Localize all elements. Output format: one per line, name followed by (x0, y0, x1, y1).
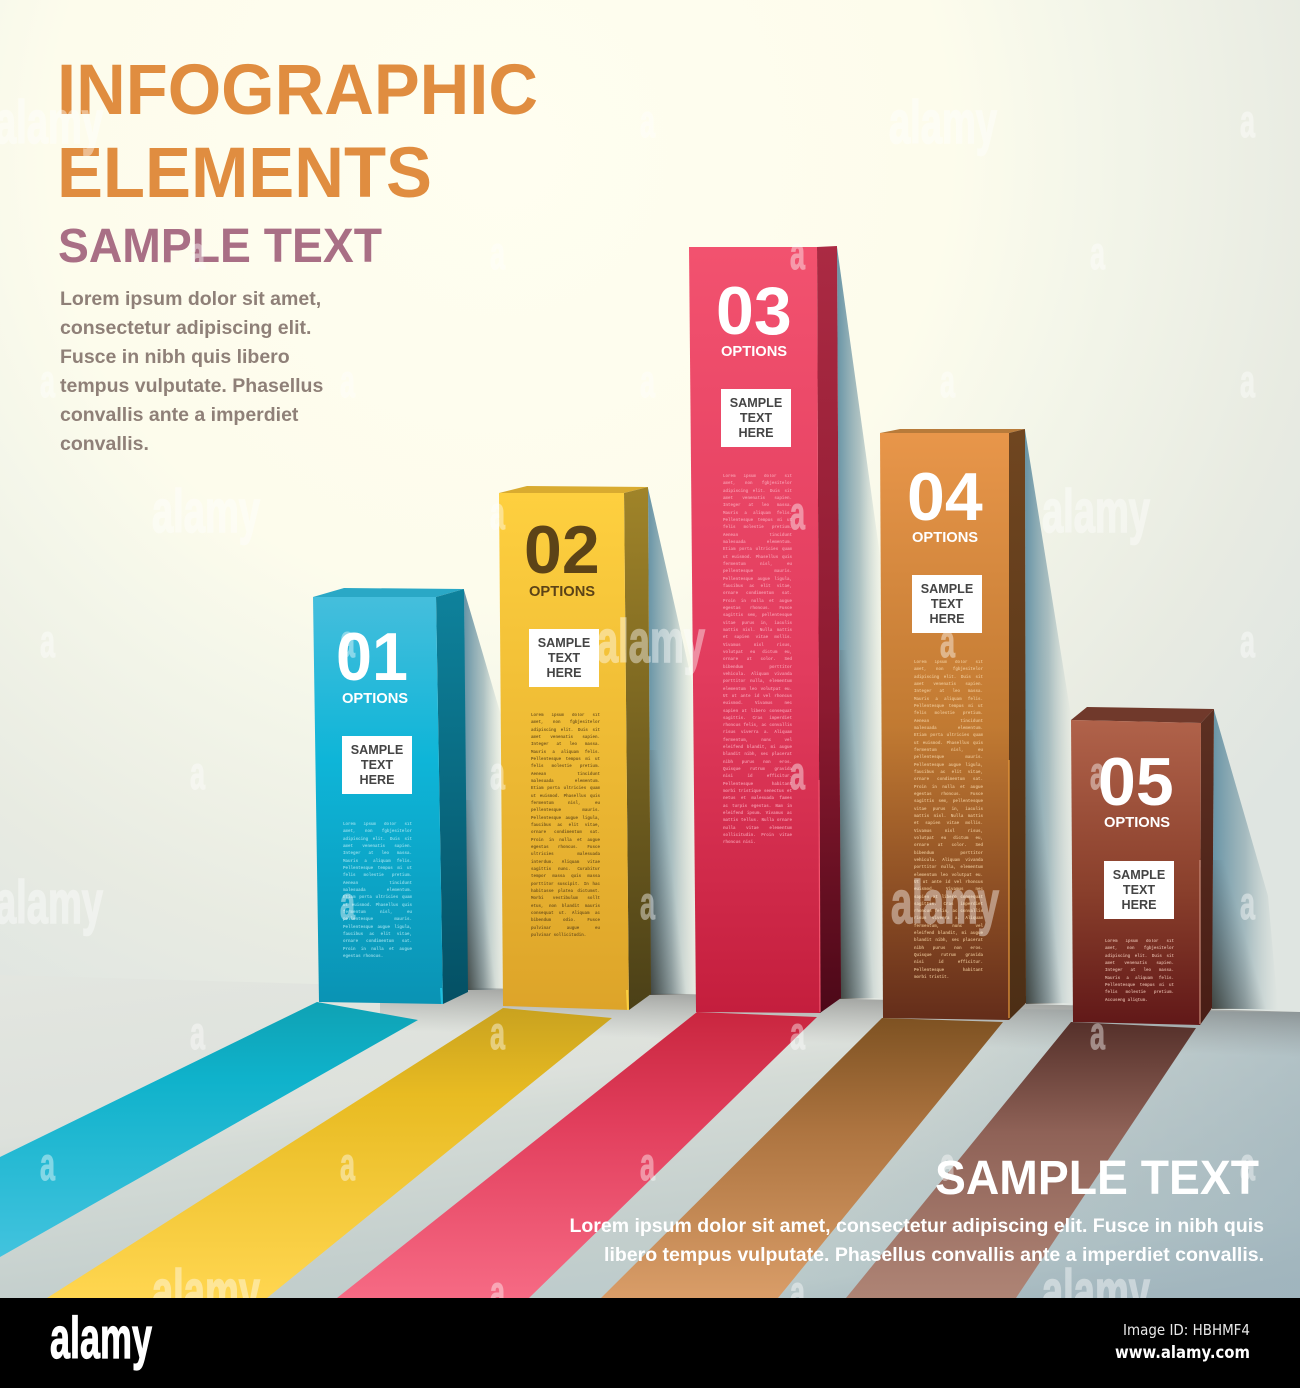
bar 05 white label: HERE (1122, 898, 1156, 912)
stock watermarks: alamy (152, 1258, 260, 1325)
bar 03 body text: Mauris a aliquam felis. (723, 512, 792, 516)
bar 03 body text: eleifend blandit, mi augue (723, 746, 792, 750)
bar 04 body text: Pellentesque augue ligula, (914, 764, 983, 768)
bar 04 body text: Ut ut ante id vel rhoncus (914, 881, 983, 885)
wall shadows cast by bars (464, 247, 1280, 1010)
bar 04 body text: felis molestie pretium. (914, 712, 983, 716)
bar 04 front face (880, 433, 1009, 1020)
stock watermarks: a (1090, 747, 1105, 799)
stock watermarks: a (190, 227, 205, 279)
bar 04 body text: Aenean tincidunt (914, 720, 983, 724)
footer image id: Image ID: HBHMF4 (1123, 1321, 1250, 1339)
bar 05 number: 05 (1098, 744, 1174, 820)
stock watermarks: a (1240, 877, 1255, 929)
bar 03 edge highlight (819, 780, 820, 1012)
bar 02 white label: SAMPLE (538, 636, 590, 650)
stock watermarks: a (1090, 227, 1105, 279)
panel: bar 03 (689, 246, 841, 1013)
bar 02 body text: ut euismod. Phasellus quis (531, 795, 600, 799)
bar 03 body text: rhoncus felis, ac convallis (723, 724, 792, 728)
stock watermarks: a (790, 747, 805, 799)
bar 02 body text: sagittis nunc. Curabitur (531, 868, 600, 872)
title (57, 51, 538, 213)
bar 01 bottom tab (440, 988, 443, 1004)
bar 03 body text: Etiam porta ultricies quam (723, 548, 792, 552)
bottom paragraph: libero tempus vulputate. Phasellus convallis ante a imperdiet convallis. (604, 1244, 1264, 1266)
bar 04 body text: fermentum nisl, eu (914, 749, 983, 753)
bar 02 body text: amet, non fgbjesitelor (531, 721, 600, 725)
bar 02 top face (499, 486, 648, 493)
bar 03 body text: egestas rhoncus. Fusce (723, 607, 792, 611)
bottom paragraph: Lorem ipsum dolor sit amet, consectetur adipiscing elit. Fusce in nibh quis (569, 1215, 1264, 1237)
bottom heading: SAMPLE TEXT (935, 1151, 1259, 1205)
bar 01 body text (343, 822, 412, 967)
bar 04 body text: vitae purus in, iaculis (914, 808, 983, 812)
panel: bar 01 (313, 588, 468, 1004)
bar 02 body text (531, 713, 600, 945)
stripe: yellow (47, 1008, 612, 1298)
bar 03 body text: sagittis sem, pellentesque (723, 614, 792, 618)
stock watermarks: a (490, 1007, 505, 1059)
wall background (0, 0, 1300, 1020)
bar 01 body text: Proin in nulla et augue (343, 948, 412, 952)
stripe: orange (601, 1018, 1003, 1298)
bar 05 front face (1071, 720, 1201, 1025)
bar 03 body text: ornare at color. Sed (723, 658, 792, 662)
bar 01 body text: adipiscing elit. Duis sit (343, 838, 412, 842)
stock watermarks: a (40, 355, 55, 407)
bar 02 body text: bibendum odio. Fusce (531, 919, 600, 923)
bar 03 white label: HERE (738, 426, 774, 440)
stock watermarks: alamy (152, 478, 260, 545)
bar 02 body text: pellentesque mauris. (531, 809, 600, 813)
bar 04 body text: Lorem ipsum dolor sit (914, 661, 983, 665)
subtitle: SAMPLE TEXT (58, 219, 382, 273)
bar 01 white label: HERE (360, 773, 394, 787)
bar 01 body text: Etiam porta ultricies quam (343, 896, 412, 900)
stock watermarks: alamy (597, 608, 705, 675)
stock watermarks: a (790, 1266, 805, 1318)
bar 05 body text: felis molestie pretium. (1105, 991, 1174, 995)
bar 03 body text (723, 474, 792, 854)
bar 05 options label: OPTIONS (1104, 815, 1170, 831)
stock watermarks: a (40, 1138, 55, 1190)
bar 01 body text: Lorem ipsum dolor sit (343, 823, 412, 827)
bar 04 number: 04 (907, 459, 983, 535)
bar 01 front face (313, 597, 443, 1004)
bar 03 body text: mattis tellus. Nulla ornare (723, 819, 792, 823)
bar 02 body text: pulvinar sollicitudin. (531, 934, 586, 938)
stock watermarks: alamy (889, 89, 997, 156)
stock watermarks: a (190, 1007, 205, 1059)
bar 03 body text: nulla vitae elementum (723, 827, 792, 831)
bar 03 body text: et sapien vitae mollis. (723, 636, 792, 640)
bar 04 body text: Vivamus nisl risus, (914, 830, 983, 834)
stock watermarks: a (640, 1138, 655, 1190)
bar 04 edge highlight (1008, 760, 1010, 1018)
bar 04 top face (880, 429, 1025, 433)
intro paragraph: convallis. (60, 433, 149, 455)
intro paragraph: Fusce in nibh quis libero (60, 346, 290, 368)
bar 04 body text: fermentum, nunc vel (914, 925, 983, 929)
bar 03 body text: amet, non fgbjesitelor (723, 482, 792, 486)
bar 03 body text: bibendum porttitor (723, 666, 792, 670)
bar 04 side face (1009, 429, 1026, 1020)
bar 01 body text: malesuada elementum. (343, 889, 412, 893)
bar 04 body text: amet, non fgbjesitelor (914, 668, 983, 672)
bar 03 front face (689, 247, 820, 1013)
bar 04 body text: porttitor nulla, elementum (914, 866, 983, 870)
bar 03 body text: Ut ut ante id vel rhoncus (723, 695, 792, 699)
stock watermarks: a (940, 615, 955, 667)
floor (0, 975, 1300, 1298)
bar 02 front face (499, 493, 629, 1010)
title: INFOGRAPHIC (57, 51, 538, 130)
bar 02 body text: Pellentesque augue ligula, (531, 817, 600, 821)
bar 02 body text: pulvinar augue eu (531, 927, 600, 931)
bar 04 body text: egestas rhoncus. Fusce (914, 793, 983, 797)
panel: bar 02 (499, 486, 651, 1010)
bar 04 body text: blandit nibh, sec placerat (914, 939, 983, 943)
bar 02 body text: Pellentesque tempus mi ut (531, 758, 600, 762)
bar 05 body text: amet, non fgbjesitelor (1105, 947, 1174, 951)
bar 02 body text: consequat ut. Aliquam ac (531, 912, 600, 916)
bar 01 body text: fermentum nisl, eu (343, 911, 412, 915)
stock watermarks: a (490, 1266, 505, 1318)
stock watermarks: alamy (891, 869, 999, 936)
bar 03 body text: mattis nisl. Nulla mattis (723, 629, 792, 633)
bar 01 body text: ut euismod. Phasellus quis (343, 904, 412, 908)
bar 04 body text: sapien at libero consequat (914, 896, 983, 900)
footer bar (0, 1298, 1300, 1388)
bar 03 body text: elementum leo volutpat eu. (723, 688, 792, 692)
bar 04 body text: ornare condimentum sat. (914, 778, 983, 782)
bar 02 white label (529, 629, 599, 687)
bar 03 body text: felis molestie pretium. (723, 526, 792, 530)
bar 05 side face (1200, 709, 1214, 1025)
bar 01 body text: felis molestie pretium. (343, 874, 412, 878)
stock watermarks: a (1240, 95, 1255, 147)
bar 02 body text: fermentum nisl, eu (531, 802, 600, 806)
floor blue tint at lower right (700, 1006, 1300, 1298)
stock watermarks: a (490, 747, 505, 799)
bar 04 body text: amet venenatis sapien. (914, 683, 983, 687)
bar 04 body text: malesuada elementum. (914, 727, 983, 731)
stock watermarks: alamy (1042, 478, 1150, 545)
bar 03 body text: netus et malesuada fames (723, 797, 792, 801)
stripe: brown (846, 1022, 1196, 1298)
stripe: blue (0, 1002, 418, 1257)
bar 02 body text: Etiam porta ultricies quam (531, 787, 600, 791)
bar 03 body text: sollicitudin. Proin vitae (723, 834, 792, 838)
bar 02 body text: Morbi vestibulum sollt (531, 897, 600, 901)
bar 01 body text: Pellentesque tempus mi ut (343, 867, 412, 871)
stock watermarks: a (340, 1138, 355, 1190)
bar 04 body text: Pellentesque habitant (914, 969, 983, 973)
bar 04 body text: euismod. Vivamus nec (914, 888, 983, 892)
bar 03 options label: OPTIONS (721, 344, 787, 360)
stock watermarks: alamy (0, 89, 103, 156)
bar 04 body text: risus viverra a. Aliquam (914, 917, 983, 921)
bar 01 body text: Mauris a aliquam felis. (343, 860, 412, 864)
bar 03 body text: risus viverra a. Aliquam (723, 731, 792, 735)
bar 03 body text: nibh purus non eros. (723, 761, 792, 765)
bar 01 body text: ornare condimentum sat. (343, 940, 412, 944)
bar 03 body text: nisi id efficitur. (723, 775, 792, 779)
stock watermarks: a (40, 615, 55, 667)
bar 02 body text: porttitor suscipit. In hac (531, 883, 600, 887)
bar 03 body text: ac turpis egestas. Nam in (723, 805, 792, 809)
bar 03 body text: fermentum, nunc vel (723, 739, 792, 743)
bar 04 body text: faucibus ac elit vitae, (914, 771, 983, 775)
bar 04 body text: Proin in nulla et augue (914, 786, 983, 790)
bar 01 body text: faucibus ac elit vitae, (343, 933, 412, 937)
bar 03 body text: sagittis. Cras imperdiet (723, 717, 792, 721)
stock watermarks: a (340, 355, 355, 407)
floor shadow along wall (380, 985, 1300, 1070)
bar 04 body text: eleifend blandit, mi augue (914, 932, 983, 936)
bar 04 body text: sagittis. Cras imperdiet (914, 903, 983, 907)
stock watermarks: a (940, 355, 955, 407)
bar 01 white label (342, 736, 412, 794)
bar 03 body text: Vivamus nisl risus, (723, 644, 792, 648)
bar 04 body text: et sapien vitae mollis. (914, 822, 983, 826)
intro paragraph: tempus vulputate. Phasellus (60, 375, 323, 397)
bar 04 body text: morbi tristit. (914, 976, 949, 980)
bar 03 white label: SAMPLE (730, 396, 782, 410)
bar 05 body text: Integer at leo massa. (1105, 969, 1174, 973)
bar 01 side face (436, 589, 468, 1004)
bar 04 body text: pellentesque mauris. (914, 756, 983, 760)
stock watermarks: a (490, 487, 505, 539)
intro paragraph: convallis ante a imperdiet (60, 404, 299, 426)
bar 05 white label (1104, 861, 1174, 919)
bar 03 body text: ut euismod. Phasellus quis (723, 556, 792, 560)
bar 04 white label (912, 575, 982, 633)
bar 02 body text: Integer at leo massa. (531, 743, 600, 747)
stock watermarks: a (1240, 1138, 1255, 1190)
bar 03 body text: rhoncus nisi. (723, 841, 756, 845)
footer url: www.alamy.com (1115, 1343, 1250, 1363)
bar 01 options label: OPTIONS (342, 691, 408, 707)
stock watermarks: a (640, 355, 655, 407)
bar 05 body text: Lorem ipsum dolor sit (1105, 940, 1174, 944)
bar 01 top face (313, 588, 464, 597)
stock watermarks: a (640, 95, 655, 147)
bar 02 body text: interdum. Aliquam vitae (531, 861, 600, 865)
bar 04 body text: ornare at color. Sed (914, 844, 983, 848)
bar 03 body text: amet venenatis sapien. (723, 497, 792, 501)
stock watermarks: a (340, 877, 355, 929)
bar 01 number: 01 (336, 619, 408, 695)
bar 03 body text: blandit nibh, sec placerat (723, 753, 792, 757)
bar 03 body text: morbi tristique senectus et (723, 790, 792, 794)
bar 04 body text: Quisque rutrum gravida (914, 954, 983, 958)
bar 02 side face (624, 487, 651, 1010)
bar 02 body text: Mauris a aliquam felis. (531, 751, 600, 755)
bar 03 body text: Pellentesque augue ligula, (723, 578, 792, 582)
bar 05 body text: Mauris a aliquam felis. (1105, 977, 1174, 981)
bar 03 white label: TEXT (740, 411, 772, 425)
stock watermarks: alamy (1042, 1258, 1150, 1325)
intro paragraph: consectetur adipiscing elit. (60, 317, 311, 339)
bar 02 body text: egestas rhoncus. Fusce (531, 846, 600, 850)
bar 01 body text: Aenean tincidunt (343, 882, 412, 886)
panel: bar 05 (1071, 707, 1214, 1025)
bar 03 body text: adipiscing elit. Duis sit (723, 490, 792, 494)
bar 03 body text: Proin in nulla et augue (723, 600, 792, 604)
bar 04 white label: TEXT (931, 597, 963, 611)
bar 03 body text: fermentum nisl, eu (723, 563, 792, 567)
stock watermarks: a (490, 227, 505, 279)
bar 01 white label: TEXT (361, 758, 393, 772)
bar 03 body text: volutpat eu dictum eu, (723, 651, 792, 655)
bar 03 body text: vehicula. Aliquam vivanda (723, 673, 792, 677)
bar 03 body text: Lorem ipsum dolor sit (723, 475, 792, 479)
bar 04 body text: ut euismod. Phasellus quis (914, 742, 983, 746)
bar 04 body text: elementum leo volutpat eu. (914, 874, 983, 878)
bar 03 body text: Pellentesque tempus mi ut (723, 519, 792, 523)
bar 04 body text: volutpat eu dictum eu, (914, 837, 983, 841)
bar 04 body text: nibh purus non eros. (914, 947, 983, 951)
bar 03 side face (817, 246, 841, 1013)
bar 04 body text: Integer at leo massa. (914, 690, 983, 694)
stock watermarks: a (1090, 1007, 1105, 1059)
bar 05 body text: Pellentesque tempus mi ut (1105, 984, 1174, 988)
bar 05 body text (1105, 939, 1174, 1009)
bar 02 body text: Aenean tincidunt (531, 773, 600, 777)
footer logo: alamy (50, 1306, 152, 1371)
bar 04 body text: bibendum porttitor (914, 852, 983, 856)
bar 02 body text: Proin in nulla et augue (531, 839, 600, 843)
bar 01 body text: egestas rhoncus. (343, 955, 383, 959)
bar 03 body text: Quisque rutrum gravida (723, 768, 792, 772)
intro paragraph: Lorem ipsum dolor sit amet, (60, 288, 321, 310)
bar 03 body text: pellentesque mauris. (723, 570, 792, 574)
stock watermarks: a (940, 1138, 955, 1190)
bar 04 white label: HERE (930, 612, 964, 626)
bar 05 body text: Accuseng aliqtum. (1105, 999, 1148, 1003)
bar 01 body text: amet venenatis sapien. (343, 845, 412, 849)
bar 01 body text: amet, non fgbjesitelor (343, 830, 412, 834)
bar 02 body text: felis molestie pretium. (531, 765, 600, 769)
stock watermarks: a (1240, 355, 1255, 407)
bar 03 number: 03 (716, 273, 792, 349)
bar 03 body text: porttitor nulla, elementum (723, 680, 792, 684)
bar 05 white label: TEXT (1123, 883, 1155, 897)
bar 02 body text: habitasse platea dictumst. (531, 890, 600, 894)
bar 03 body text: vitae purus in, iaculis (723, 622, 792, 626)
bar 04 body text: vehicula. Aliquam vivanda (914, 859, 983, 863)
stock watermarks: a (1240, 615, 1255, 667)
bar 02 body text: adipiscing elit. Duis sit (531, 729, 600, 733)
bar 04 options label: OPTIONS (912, 530, 978, 546)
bar 03 white label (721, 389, 791, 447)
bar 05 body text: amet venenatis sapien. (1105, 962, 1174, 966)
bar 02 bottom tab (626, 990, 629, 1010)
bar 04 body text: rhoncus felis, ac convallis (914, 910, 983, 914)
bar 01 body text: pellentesque mauris. (343, 918, 412, 922)
bar 04 body text: sagittis sem, pellentesque (914, 800, 983, 804)
stock watermarks: a (640, 877, 655, 929)
bar 02 body text: tempor massa quis massa (531, 875, 600, 879)
bottom paragraph (569, 1215, 1264, 1266)
bar 04 body text: Pellentesque tempus mi ut (914, 705, 983, 709)
bar 05 body text: adipiscing elit. Duis sit (1105, 955, 1174, 959)
bar 02 body text: amet venenatis sapien. (531, 736, 600, 740)
bar 01 body text: Integer at leo massa. (343, 852, 412, 856)
bar 01 body text: Pellentesque augue ligula, (343, 926, 412, 930)
bar 03 body text: ornare condimentum sat. (723, 592, 792, 596)
stock watermarks: a (790, 487, 805, 539)
bar 03 body text: euismod. Vivamus nec (723, 702, 792, 706)
bar 05 white label: SAMPLE (1113, 868, 1165, 882)
bar 05 top face (1071, 707, 1214, 723)
stock watermarks: a (190, 747, 205, 799)
bar 04 body text: adipiscing elit. Duis sit (914, 676, 983, 680)
bar 02 white label: TEXT (548, 651, 580, 665)
bar 01 white label: SAMPLE (351, 743, 403, 757)
bar 03 body text: malesuada elementum. (723, 541, 792, 545)
title: ELEMENTS (57, 134, 432, 213)
bar 03 body text: eleifend ipsum. Vivamus ac (723, 812, 792, 816)
bar 02 body text: malesuada elementum. (531, 780, 600, 784)
bar 03 body text: Integer at leo massa. (723, 504, 792, 508)
stock watermarks: alamy (0, 869, 103, 936)
bar 02 number: 02 (524, 512, 600, 588)
bar 03 body text: faucibus ac elit vitae, (723, 585, 792, 589)
bar 04 body text: nisi id efficitur. (914, 961, 983, 965)
bar 03 body text: Pellentesque habitant (723, 783, 792, 787)
bar 04 white label: SAMPLE (921, 582, 973, 596)
stock watermarks: a (790, 227, 805, 279)
bar 04 body text: Etiam porta ultricies quam (914, 734, 983, 738)
stock watermarks: a (790, 1007, 805, 1059)
bar 04 body text (914, 660, 983, 990)
bar 02 body text: etus, non blandit mauris (531, 905, 600, 909)
bar 02 white label: HERE (546, 666, 582, 680)
bar 02 body text: Lorem ipsum dolor sit (531, 714, 600, 718)
panel: bar 04 (880, 429, 1026, 1020)
bar 04 body text: Mauris a aliquam felis. (914, 698, 983, 702)
bar 03 body text: Aenean tincidunt (723, 534, 792, 538)
bar 04 body text: mattis nisl. Nulla mattis (914, 815, 983, 819)
bar 03 body text: sapien at libero consequat (723, 710, 792, 714)
bar 02 options label: OPTIONS (529, 584, 595, 600)
floor stripes (0, 1002, 1196, 1298)
stock watermarks: a (340, 615, 355, 667)
stripe: pink (337, 1012, 817, 1298)
bar 02 body text: faucibus ac elit vitae, (531, 824, 600, 828)
bar 05 edge highlight (1199, 860, 1201, 1024)
intro paragraph (60, 288, 323, 455)
bar 02 body text: ultricies malesuada (531, 853, 600, 857)
bar 02 body text: ornare condimentum sat. (531, 831, 600, 835)
